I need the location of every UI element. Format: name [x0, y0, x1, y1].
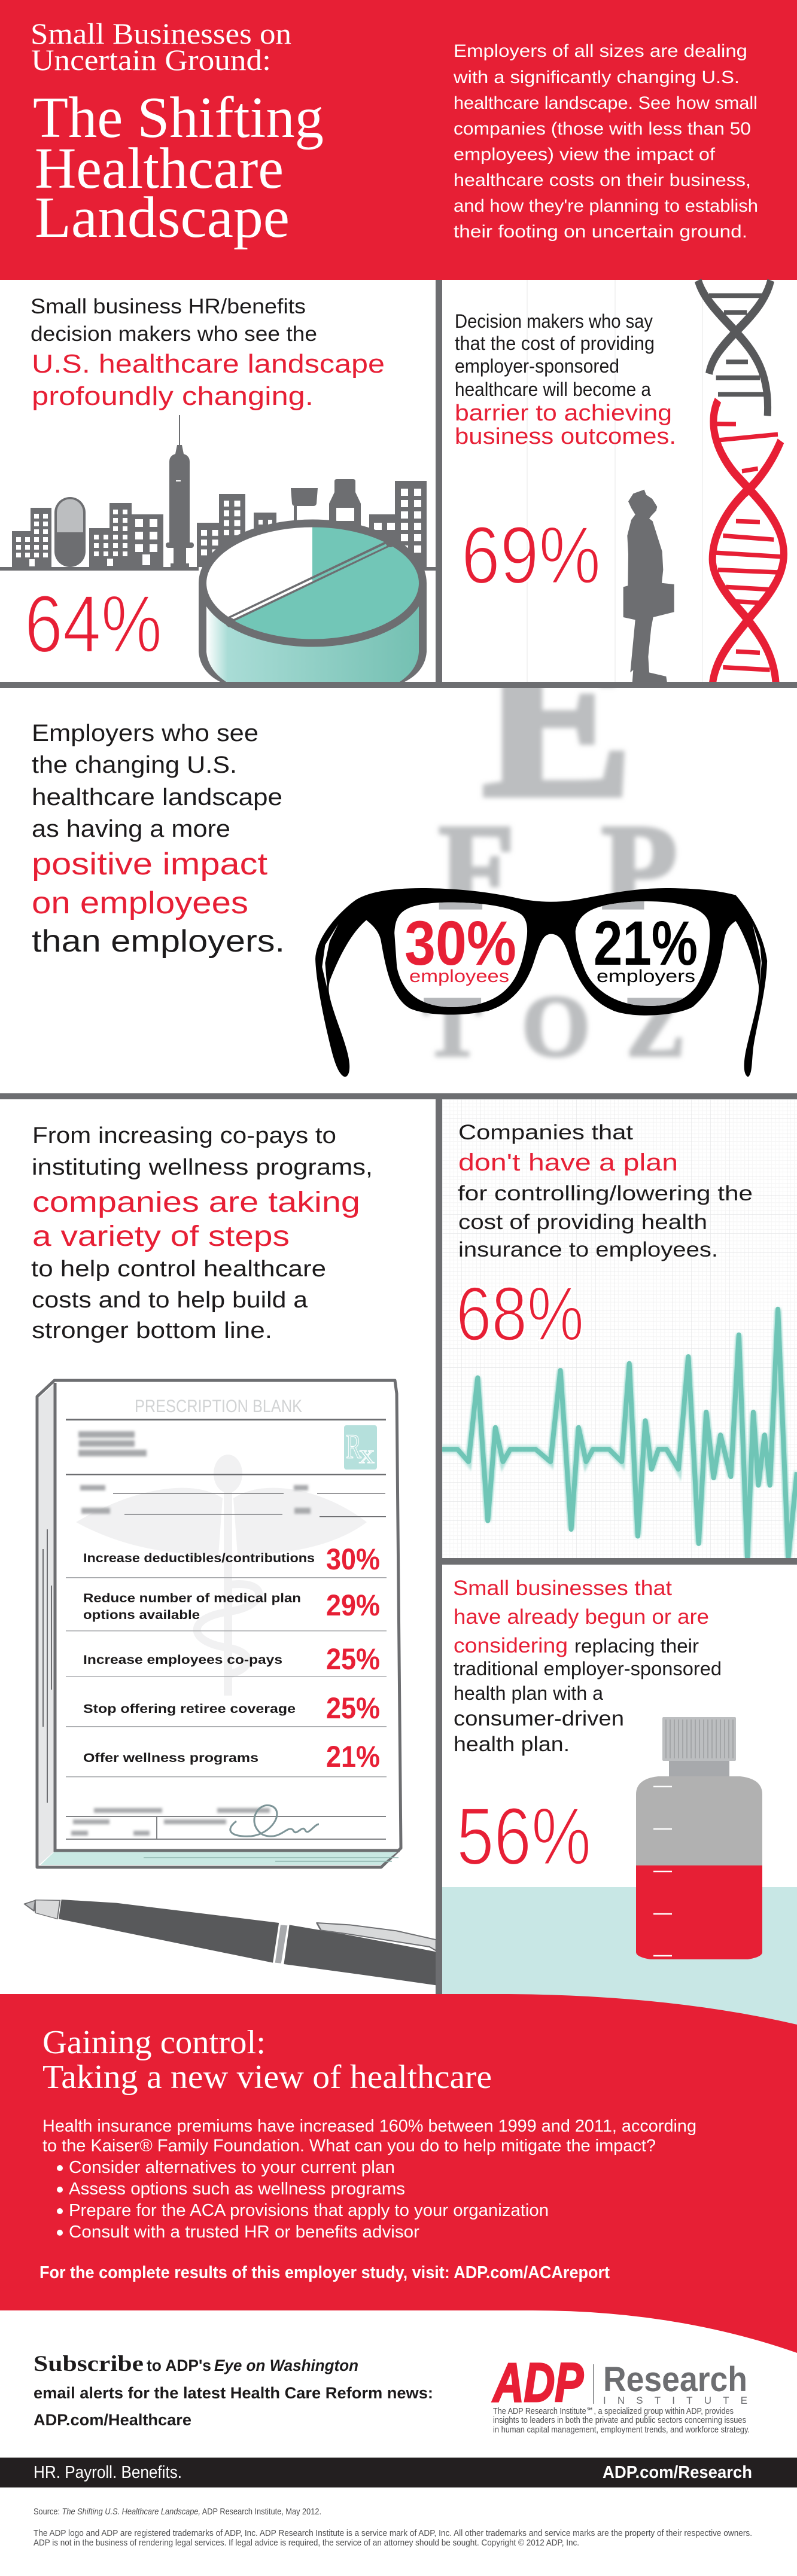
- body text: [42, 2117, 696, 2156]
- statement text: to help control healthcare: [31, 1257, 326, 1282]
- logo: ADP Research Institute: [492, 2352, 750, 2435]
- chart: heartbeat line: [442, 1309, 797, 1558]
- bullet list: Prepare for the ACA provisions that apply to your organization: [69, 2201, 549, 2220]
- source and legal text: [34, 2507, 752, 2548]
- blurred eye chart letters: F: [439, 799, 515, 937]
- statement text: on employees: [32, 886, 248, 920]
- row: medical plan options: [66, 1589, 387, 1632]
- statement text: [32, 720, 285, 959]
- row: wellness programs: 21%: [326, 1740, 380, 1773]
- row: co-pays: [66, 1642, 387, 1677]
- statement text: [458, 1121, 753, 1261]
- table: steps: [66, 1542, 387, 1778]
- statement text: health plan.: [454, 1733, 570, 1756]
- bullet list: Assess options such as wellness programs: [69, 2179, 405, 2199]
- logo description: The ADP Research Institute℠, a specialized group within ADP, provides: [493, 2407, 734, 2416]
- statement text: insurance to employees.: [458, 1238, 718, 1261]
- statement text: Small businesses that: [453, 1577, 672, 1600]
- icon: capsule: [54, 497, 86, 567]
- panel: no plan: [442, 1099, 797, 1558]
- statement text: instituting wellness programs,: [32, 1155, 373, 1180]
- kicker heading: Uncertain Ground:: [31, 43, 271, 77]
- divider: second row: [0, 1093, 797, 1099]
- statement text: have already begun or are: [454, 1605, 709, 1629]
- source and legal text: The ADP logo and ADP are registered trademarks of ADP, Inc. ADP Research Institute is a service mark of ADP, Inc. All other trademarks and service marks are the property of their respective owners.: [34, 2529, 752, 2538]
- intro text: with a significantly changing U.S.: [453, 68, 740, 87]
- intro text: healthcare landscape. See how small: [454, 93, 758, 113]
- icon: large pill: [197, 508, 427, 683]
- intro text: and how they're planning to establish: [454, 196, 758, 216]
- statement text: employer-sponsored: [455, 355, 619, 377]
- row: retiree coverage: [66, 1691, 387, 1727]
- footer bar: HR. Payroll. Benefits.: [34, 2463, 182, 2482]
- gray helix: [698, 281, 771, 416]
- stat: 30% employees: employees: [409, 967, 509, 986]
- row: deductibles: [66, 1542, 387, 1578]
- footer bar: [0, 2458, 797, 2487]
- panel: landscape changing: [0, 295, 437, 683]
- pad body: [37, 1380, 401, 1867]
- red helix: [713, 400, 784, 683]
- stat: 69%: 69%: [461, 510, 601, 600]
- statement text: Small business HR/benefits: [31, 295, 306, 318]
- subscribe block: Subscribe: [34, 2352, 144, 2376]
- statement text: than employers.: [32, 924, 285, 959]
- stat: 56%: 56%: [457, 1791, 591, 1882]
- subscribe block: to ADP's: [147, 2356, 211, 2374]
- row: medical plan options: options available: [83, 1608, 200, 1622]
- call to action: For the complete results of this employer study, visit: ADP.com/ACAreport: [39, 2263, 610, 2282]
- statement text: companies are taking: [32, 1187, 360, 1218]
- kicker heading: [31, 17, 291, 77]
- title: The Shifting: [33, 86, 324, 150]
- blurred form fields: [71, 1431, 311, 1836]
- title: Healthcare: [35, 136, 284, 200]
- statement text: business outcomes.: [455, 424, 676, 449]
- statement text: that the cost of providing: [455, 333, 655, 354]
- row: medical plan options: 29%: [326, 1589, 380, 1622]
- statement text: positive impact: [32, 847, 268, 882]
- body text: to the Kaiser® Family Foundation. What can you do to help mitigate the impact?: [42, 2136, 656, 2156]
- signature area: [66, 1805, 386, 1839]
- stat: 68%: 68%: [456, 1272, 584, 1357]
- subscribe block: Eye on Washington: [214, 2356, 358, 2374]
- blurred eye chart letters: Z: [626, 977, 685, 1075]
- statement text: health plan with a: [454, 1682, 603, 1704]
- intro text: Employers of all sizes are dealing: [454, 41, 747, 61]
- logo: ADP Research Institute: Research: [603, 2360, 747, 2399]
- stat: 64%: 64%: [25, 578, 162, 669]
- icon: bottle: [329, 479, 361, 526]
- panel: eye chart: [32, 688, 767, 1077]
- statement text: stronger bottom line.: [32, 1318, 272, 1343]
- statement text: as having a more: [32, 816, 230, 842]
- subscribe block: ADP.com/Healthcare: [34, 2411, 191, 2429]
- prescription pad: [37, 1380, 401, 1867]
- source and legal text: ADP is not in the business of rendering legal services. If legal advice is required, the service of an attorney should be sought. Copyright © 2012 ADP, Inc.: [34, 2538, 579, 2548]
- caduceus watermark: [76, 1455, 367, 1696]
- panel: gaining control: [0, 1994, 797, 2353]
- dividers: first row: [0, 280, 797, 688]
- statement text: costs and to help build a: [32, 1288, 308, 1313]
- intro text: their footing on uncertain ground.: [454, 222, 747, 242]
- panel: steps taken: [25, 1123, 436, 1985]
- statement text: don't have a plan: [458, 1150, 678, 1176]
- subscribe block: email alerts for the latest Health Care Reform news:: [34, 2384, 433, 2402]
- blurred eye chart letters: T: [423, 977, 482, 1075]
- statement text: [31, 295, 385, 411]
- intro text: [453, 41, 758, 242]
- bullet list: [57, 2158, 549, 2242]
- intro text: healthcare costs on their business,: [454, 170, 751, 190]
- statement text: Companies that: [458, 1121, 633, 1144]
- row: medical plan options: Reduce number of medical plan: [83, 1592, 301, 1605]
- statement text: [455, 310, 676, 449]
- kicker heading: Small Businesses on: [31, 17, 291, 50]
- panel: header: [0, 0, 797, 280]
- stat: 30% employees: 30%: [404, 909, 516, 978]
- statement text: Employers who see: [32, 720, 258, 746]
- intro text: employees) view the impact of: [454, 145, 716, 164]
- panel: consumer-driven plans: [442, 1577, 797, 2031]
- bullet list: Consult with a trusted HR or benefits advisor: [69, 2223, 419, 2242]
- row: co-pays: 25%: [326, 1642, 380, 1676]
- icon: glasses: [315, 888, 767, 1077]
- statement text: considering: [454, 1634, 568, 1657]
- intro text: companies (those with less than 50: [454, 119, 751, 139]
- icon: medicine bottle: [636, 1717, 762, 1959]
- statement text: consumer-driven: [454, 1707, 624, 1730]
- statement text: U.S. healthcare landscape: [32, 349, 385, 379]
- footer bar: ADP.com/Research: [603, 2463, 752, 2482]
- logo description: in human capital management, employment trends, and workforce strategy.: [493, 2425, 750, 2435]
- statement text: [31, 1123, 373, 1343]
- icon: Rx badge: R: [346, 1427, 361, 1466]
- form rules: [66, 1419, 386, 1517]
- title: [33, 86, 324, 249]
- statement text: From increasing co-pays to: [32, 1123, 336, 1148]
- icon: DNA helix: [698, 281, 784, 683]
- heading: Taking a new view of healthcare: [42, 2059, 492, 2096]
- statement text: Decision makers who say: [455, 310, 653, 332]
- statement text: cost of providing health: [458, 1211, 707, 1234]
- logo description: insights to leaders in both the private and public sectors concerning issues: [493, 2416, 746, 2425]
- statement text: replacing their: [574, 1635, 699, 1657]
- stat: 21% employers: employers: [597, 967, 695, 986]
- icon: pill cup: [291, 488, 318, 522]
- icon: businessman silhouette: [623, 490, 674, 683]
- logo: ADP Research Institute: INSTITUTE: [603, 2395, 747, 2406]
- blurred eye chart letters: E: [482, 593, 633, 845]
- logo description: [493, 2407, 750, 2435]
- row: wellness programs: Offer wellness programs: [83, 1751, 258, 1765]
- body text: Health insurance premiums have increased 160% between 1999 and 2011, according: [42, 2117, 696, 2136]
- statement text: traditional employer-sponsored: [454, 1658, 722, 1679]
- skyline illustration: [0, 415, 437, 571]
- statement text: profoundly changing.: [32, 382, 314, 411]
- statement text: a variety of steps: [32, 1221, 290, 1252]
- statement text: healthcare landscape: [32, 784, 282, 810]
- subscribe block: [34, 2352, 433, 2429]
- statement text: barrier to achieving: [455, 401, 672, 426]
- row: retiree coverage: Stop offering retiree coverage: [83, 1702, 296, 1716]
- panel: barrier: [455, 280, 784, 683]
- icon: Rx badge: x: [359, 1440, 375, 1469]
- source and legal text: Source: The Shifting U.S. Healthcare Landscape, ADP Research Institute, May 2012.: [34, 2507, 321, 2517]
- stat: 21% employers: 21%: [594, 909, 698, 978]
- title: Landscape: [35, 185, 290, 249]
- statement text: healthcare will become a: [455, 379, 651, 400]
- blurred eye chart letters: [421, 688, 685, 1060]
- statement text: for controlling/lowering the: [458, 1182, 753, 1205]
- icon: syringe tower: [166, 415, 194, 567]
- faint grid lines: [527, 280, 702, 682]
- row: deductibles: Increase deductibles/contributions: [83, 1551, 315, 1565]
- blurred eye chart letters: P: [601, 799, 677, 937]
- row: wellness programs: [66, 1740, 387, 1778]
- form label: PRESCRIPTION BLANK: [135, 1397, 302, 1416]
- row: retiree coverage: 25%: [326, 1691, 380, 1725]
- bullet list: Consider alternatives to your current plan: [69, 2158, 395, 2177]
- statement text: decision makers who see the: [31, 322, 317, 346]
- icon: pen: [25, 1900, 436, 1985]
- row: deductibles: 30%: [326, 1542, 380, 1576]
- icon: Rx badge: [344, 1425, 377, 1470]
- floor band: [442, 1887, 797, 2031]
- heading: [42, 2024, 492, 2096]
- blurred eye chart letters: O: [522, 977, 590, 1075]
- statement text: [453, 1577, 722, 1756]
- heading: Gaining control:: [42, 2024, 266, 2061]
- logo: ADP Research Institute: ADP: [492, 2352, 583, 2413]
- dividers: second row: [436, 1099, 797, 1996]
- row: co-pays: Increase employees co-pays: [83, 1653, 282, 1667]
- statement text: the changing U.S.: [32, 752, 237, 778]
